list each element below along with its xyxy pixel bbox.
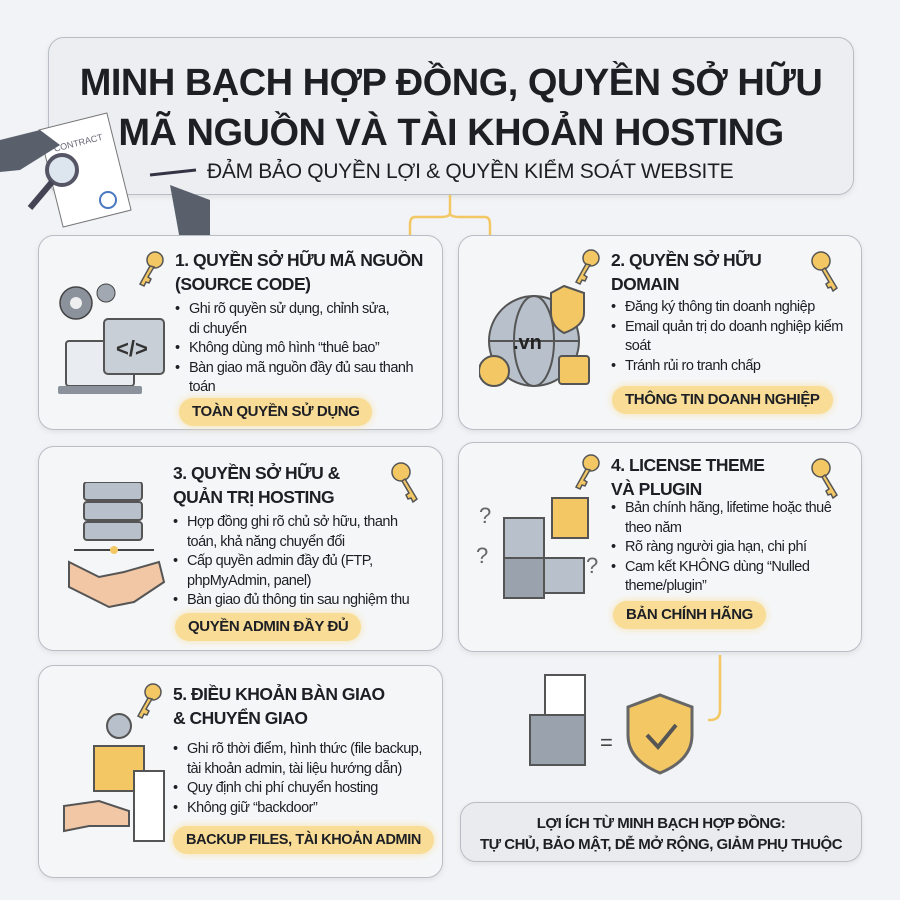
- heading 1: [175, 250, 423, 294]
- pill 5: BACKUP FILES, TÀI KHOẢN ADMIN: [186, 832, 421, 848]
- benefits box: TỰ CHỦ, BẢO MẬT, DỄ MỞ RỘNG, GIẢM PHỤ THUỘC: [480, 836, 842, 853]
- subtitle: ĐẢM BẢO QUYỀN LỢI & QUYỀN KIỂM SOÁT WEBSITE: [207, 160, 733, 183]
- key icon: [575, 249, 600, 285]
- benefits box: LỢI ÍCH TỪ MINH BẠCH HỢP ĐỒNG:: [537, 815, 785, 832]
- bullets 1: Ghi rõ quyền sử dụng, chỉnh sửa,: [189, 301, 389, 317]
- heading 4: [611, 455, 764, 499]
- title: [80, 61, 822, 154]
- heading 2: DOMAIN: [611, 274, 679, 294]
- bullets 2: [612, 299, 843, 374]
- header box: [48, 37, 854, 195]
- benefits box: [460, 802, 862, 862]
- panel 1: [38, 235, 443, 430]
- icon: gears and code: [58, 284, 165, 394]
- panel 3: [38, 446, 443, 651]
- heading 5: 5. ĐIỀU KHOẢN BÀN GIAO: [173, 684, 385, 704]
- icon: box handover: [63, 713, 165, 842]
- icon: checklist box equals shield: [529, 655, 722, 775]
- bullets 5: [174, 741, 422, 816]
- connector: [408, 195, 492, 235]
- heading 3: 3. QUYỀN SỞ HỮU &: [173, 463, 340, 483]
- icon: contract with hands: CONTRACT: [53, 132, 104, 154]
- icon: puzzle: ?: [479, 503, 491, 528]
- bullets 4: Rõ ràng người gia hạn, chi phí: [625, 539, 807, 555]
- heading 3: QUẢN TRỊ HOSTING: [173, 487, 334, 507]
- key icon: [575, 454, 600, 490]
- bullets 3: Cấp quyền admin đầy đủ (FTP, phpMyAdmin, panel): [187, 553, 373, 588]
- pill 1: [179, 398, 372, 426]
- pill 3: QUYỀN ADMIN ĐẦY ĐỦ: [188, 618, 348, 635]
- pill 4: [613, 601, 766, 629]
- pill 2: [612, 386, 833, 414]
- heading 1: 1. QUYỀN SỞ HỮU MÃ NGUỒN: [175, 250, 423, 270]
- icon: globe .vn: [479, 284, 590, 387]
- bullets 1: di chuyển: [189, 320, 247, 336]
- pill 5: [173, 826, 434, 854]
- pill 1: TOÀN QUYỀN SỬ DỤNG: [192, 403, 359, 420]
- title: MÃ NGUỒN VÀ TÀI KHOẢN HOSTING: [118, 112, 784, 154]
- bullets 3: [174, 514, 409, 608]
- bullets 4: [612, 500, 832, 594]
- icon: gears and code: </>: [116, 336, 148, 361]
- icon: checklist box equals shield: =: [600, 730, 613, 755]
- pill 2: THÔNG TIN DOANH NGHIỆP: [625, 391, 820, 408]
- icon: puzzle: [476, 497, 598, 599]
- title: MINH BẠCH HỢP ĐỒNG, QUYỀN SỞ HỮU: [80, 62, 822, 104]
- heading 2: 2. QUYỀN SỞ HỮU: [611, 250, 761, 270]
- key icon: [391, 462, 418, 504]
- icon: server and handshake: [68, 482, 166, 608]
- bullets 2: Tránh rủi ro tranh chấp: [625, 358, 760, 374]
- icon: globe .vn: .vn: [513, 332, 542, 354]
- bullets 3: Hợp đồng ghi rõ chủ sở hữu, thanh toán, khả năng chuyển đổi: [187, 514, 398, 550]
- icon: puzzle: ?: [586, 553, 598, 578]
- heading 3: [173, 463, 340, 507]
- heading 4: 4. LICENSE THEME: [611, 455, 764, 475]
- bullets 1: Không dùng mô hình “thuê bao”: [189, 340, 379, 356]
- icon: contract with hands: [0, 112, 210, 235]
- key icon right: [811, 251, 838, 292]
- pill 3: [175, 613, 361, 641]
- heading 5: [173, 684, 385, 728]
- bullets 2: Email quản trị do doanh nghiệp kiểm soát: [625, 318, 843, 354]
- panel 5: [38, 665, 443, 878]
- bullets 5: Ghi rõ thời điểm, hình thức (file backup, tài khoản admin, tài liệu hướng dẫn): [187, 741, 422, 776]
- key icon right: [811, 458, 838, 500]
- bullets 3: Bàn giao đủ thông tin sau nghiệm thu: [187, 592, 409, 608]
- panel 4: [458, 442, 862, 652]
- pill 4: BẢN CHÍNH HÃNG: [626, 606, 753, 623]
- heading 1: (SOURCE CODE): [175, 274, 310, 294]
- bullets 4: Bản chính hãng, lifetime hoặc thuê theo năm: [625, 500, 831, 536]
- key icon: [139, 251, 164, 287]
- bullets 5: Không giữ “backdoor”: [187, 800, 317, 816]
- heading 5: & CHUYỂN GIAO: [173, 708, 307, 728]
- heading 2: [611, 250, 761, 294]
- bullets 5: Quy định chi phí chuyển hosting: [187, 780, 378, 796]
- heading 4: VÀ PLUGIN: [611, 479, 702, 499]
- key icon: [137, 683, 162, 719]
- bullets 4: Cam kết KHÔNG dùng “Nulled theme/plugin”: [625, 558, 809, 594]
- bullets 1: Bàn giao mã nguồn đầy đủ sau thanh toán: [189, 360, 413, 395]
- bullets 1: [176, 301, 413, 395]
- panel 2: [458, 235, 862, 430]
- icon: puzzle: ?: [476, 543, 488, 568]
- bullets 2: Đăng ký thông tin doanh nghiệp: [625, 299, 815, 315]
